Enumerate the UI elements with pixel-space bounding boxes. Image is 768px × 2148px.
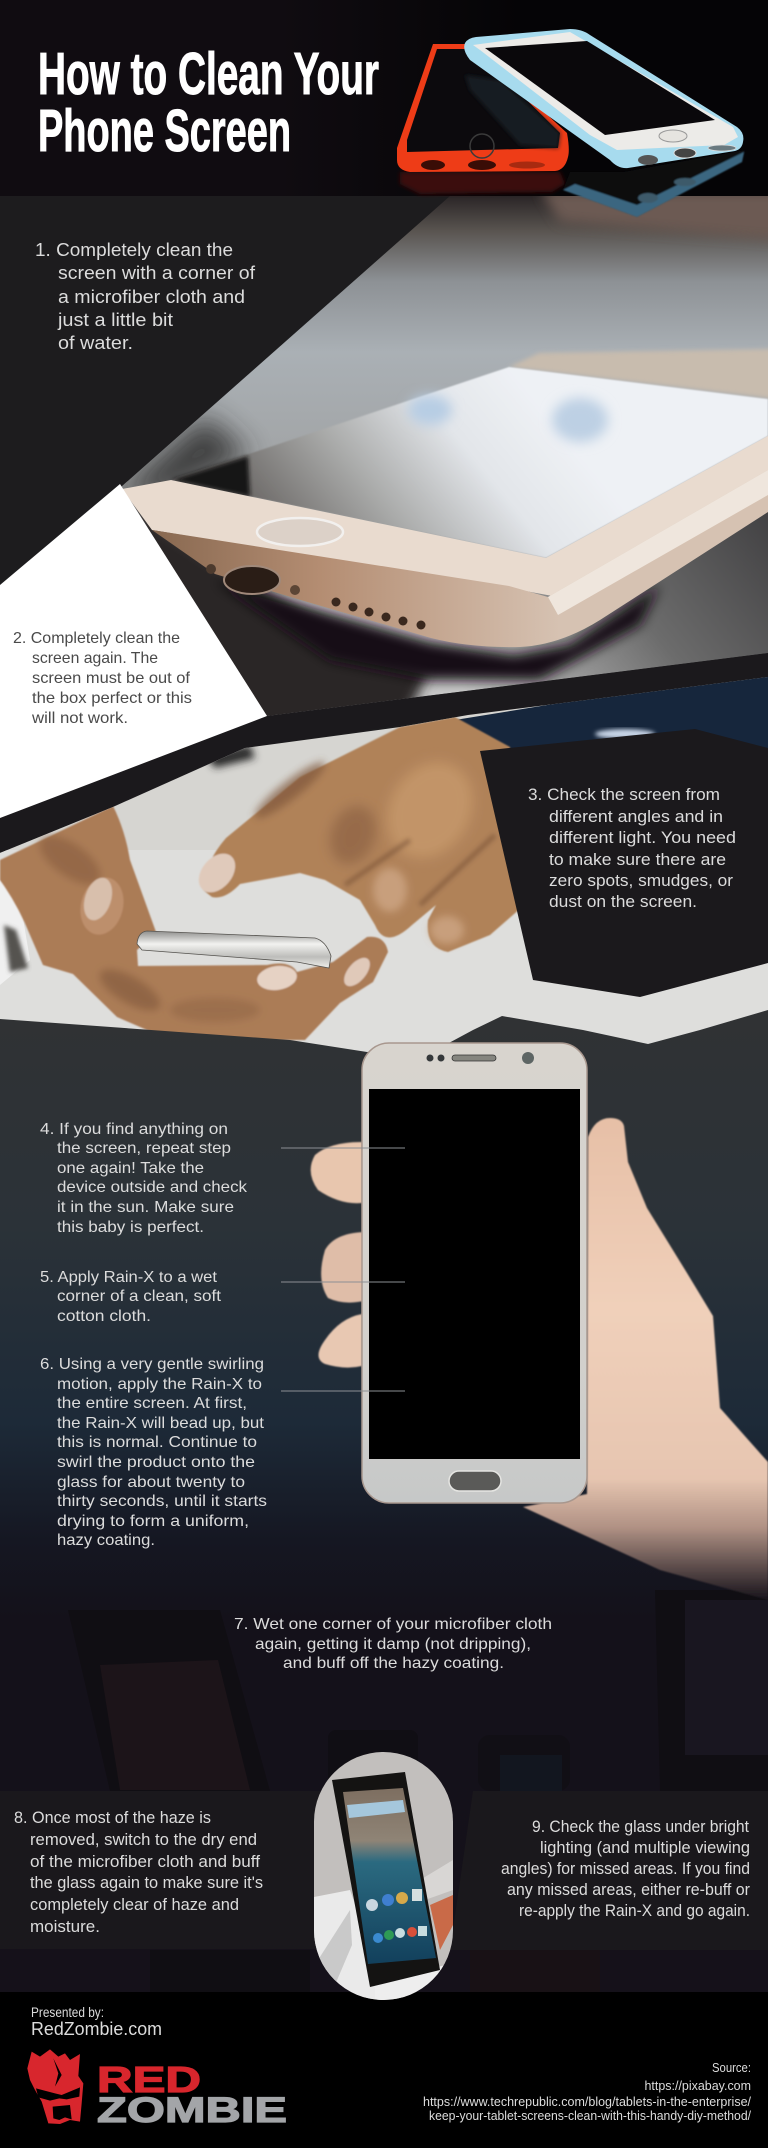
title <box>38 41 379 164</box>
step 3 text <box>528 785 736 911</box>
navy sleeve <box>458 677 768 748</box>
step 1 text <box>35 240 256 353</box>
pointer lines <box>281 1148 405 1391</box>
source credits: https://www.techrepublic.com/blog/tablets-in-the-enterprise/ <box>423 2095 752 2109</box>
phone screen <box>369 1089 580 1459</box>
source credits <box>423 2061 752 2123</box>
step 3 text: different light. You need <box>549 828 736 847</box>
blue phone <box>464 29 743 168</box>
panel: step 1 phone photo <box>100 190 768 730</box>
step 4 text <box>40 1121 248 1236</box>
title: How to Clean Your <box>38 41 379 107</box>
step 9 text <box>501 1818 750 1920</box>
step 1 text: a microfiber cloth and <box>58 287 245 307</box>
step 8 text: moisture. <box>30 1917 100 1936</box>
illustration: phone on stand in pill <box>314 1752 453 2002</box>
logo head icon <box>27 2049 83 2124</box>
step 2 text: 2. Completely clean the <box>13 630 180 647</box>
step 6 text: hazy coating. <box>57 1532 155 1549</box>
thumb nail <box>83 876 113 921</box>
red phone <box>397 44 569 172</box>
step 2 text: the box perfect or this <box>32 690 192 707</box>
presented by: RedZombie.com <box>31 2019 162 2039</box>
blue phone reflection <box>563 150 745 217</box>
step 3 text: 3. Check the screen from <box>528 785 720 804</box>
home button <box>449 1471 501 1491</box>
step 7 text: again, getting it damp (not dripping), <box>255 1636 531 1653</box>
step 6 text <box>40 1356 267 1549</box>
logo: Red Zombie <box>27 2049 287 2130</box>
title: Phone Screen <box>38 98 291 164</box>
left fingers <box>311 1142 362 1203</box>
step 6 text: 6. Using a very gentle swirling <box>40 1356 264 1373</box>
step 4 text: one again! Take the <box>57 1160 204 1177</box>
header band <box>0 0 768 217</box>
index finger nail <box>198 852 236 894</box>
search bar <box>347 1800 405 1818</box>
step 5 text: cotton cloth. <box>57 1308 151 1325</box>
step 1 text: of water. <box>58 333 133 353</box>
logo wordmark: RED <box>97 2059 201 2100</box>
step 3 text: zero spots, smudges, or <box>549 871 733 890</box>
app icons <box>366 1889 427 1943</box>
step 8 text: 8. Once most of the haze is <box>14 1808 211 1827</box>
source credits: keep-your-tablet-screens-clean-with-this-handy-diy-method/ <box>429 2109 752 2123</box>
step 4 text: device outside and check <box>57 1179 248 1196</box>
step 4 text: it in the sun. Make sure <box>57 1199 234 1216</box>
source credits: https://pixabay.com <box>644 2079 751 2093</box>
step 2 text <box>13 630 192 727</box>
source credits: Source: <box>712 2061 751 2075</box>
charging port <box>224 566 280 594</box>
panel: lower dark background <box>0 1010 768 1992</box>
logo: Red Zombie: ZOMBIE <box>97 2091 287 2130</box>
step 9 text: any missed areas, either re-buff or <box>507 1881 750 1899</box>
presented by: Presented by: <box>31 2005 104 2020</box>
step 1 text: just a little bit <box>57 310 173 330</box>
step 1 text: screen with a corner of <box>58 263 256 283</box>
step 8 text: of the microfiber cloth and buff <box>30 1852 260 1871</box>
left hand <box>0 806 388 1040</box>
step 2 text: screen must be out of <box>32 670 191 687</box>
earpiece <box>452 1055 496 1061</box>
step 3 text: dust on the screen. <box>549 892 697 911</box>
home button <box>257 518 343 546</box>
presented by <box>31 2005 162 2039</box>
hand and thumb <box>523 1118 768 1600</box>
step 6 text: motion, apply the Rain-X to <box>57 1376 262 1393</box>
panel: step 8 background <box>0 1791 322 1949</box>
camera dots <box>426 1054 434 1062</box>
faint background devices <box>68 1590 768 1992</box>
panel: step 3 dark hexagon <box>480 729 768 997</box>
step 6 text: the Rain-X will bead up, but <box>57 1415 265 1432</box>
step 6 text: the entire screen. At first, <box>57 1395 247 1412</box>
step 4 text: the screen, repeat step <box>57 1140 231 1157</box>
phone body <box>362 1043 587 1503</box>
speaker holes <box>332 598 426 630</box>
step 6 text: glass for about twenty to <box>57 1474 245 1491</box>
step 5 text: corner of a clean, soft <box>57 1288 222 1305</box>
step 2 text: screen again. The <box>32 650 158 667</box>
device seen edge-on <box>137 931 331 968</box>
step 6 text: this is normal. Continue to <box>57 1434 257 1451</box>
right hand <box>191 717 530 952</box>
step 7 text: and buff off the hazy coating. <box>283 1655 504 1672</box>
step 7 text <box>234 1616 552 1672</box>
device <box>332 1772 440 1987</box>
step 6 text: drying to form a uniform, <box>57 1513 249 1530</box>
step 5 text <box>40 1269 222 1325</box>
step 9 text: angles) for missed areas. If you find <box>501 1860 750 1878</box>
cuff shadow <box>4 925 28 972</box>
panel: step 2 white triangle <box>0 484 267 853</box>
step 1 text: 1. Completely clean the <box>35 240 233 260</box>
footer band <box>0 1992 768 2148</box>
step 2 text: will not work. <box>31 710 128 727</box>
step 9 text: 9. Check the glass under bright <box>532 1818 749 1836</box>
step 8 text: completely clear of haze and <box>30 1895 239 1914</box>
step 6 text: swirl the product onto the <box>57 1454 255 1471</box>
step 8 text: the glass again to make sure it's <box>30 1873 263 1892</box>
step 3 text: to make sure there are <box>549 850 726 869</box>
lower finger nails <box>256 963 298 993</box>
step 6 text: thirty seconds, until it starts <box>57 1493 267 1510</box>
step 7 text: 7. Wet one corner of your microfiber cloth <box>234 1616 552 1633</box>
step 5 text: 5. Apply Rain-X to a wet <box>40 1269 218 1286</box>
red phone reflection <box>400 172 565 194</box>
panel: dark diagonal band <box>0 653 768 853</box>
device screen <box>343 1788 436 1964</box>
step 9 text: re-apply the Rain-X and go again. <box>519 1902 750 1920</box>
illustration: hand holding phone <box>311 1043 768 1600</box>
front camera <box>522 1052 534 1064</box>
step 3 text: different angles and in <box>549 807 723 826</box>
step 9 text: lighting (and multiple viewing <box>540 1839 750 1857</box>
step 4 text: this baby is perfect. <box>57 1219 204 1236</box>
step 8 text: removed, switch to the dry end <box>30 1830 257 1849</box>
step 4 text: 4. If you find anything on <box>40 1121 228 1138</box>
panel: step 9 background <box>450 1791 768 1950</box>
step 8 text <box>14 1808 263 1936</box>
panel: hands photo <box>0 677 768 1052</box>
